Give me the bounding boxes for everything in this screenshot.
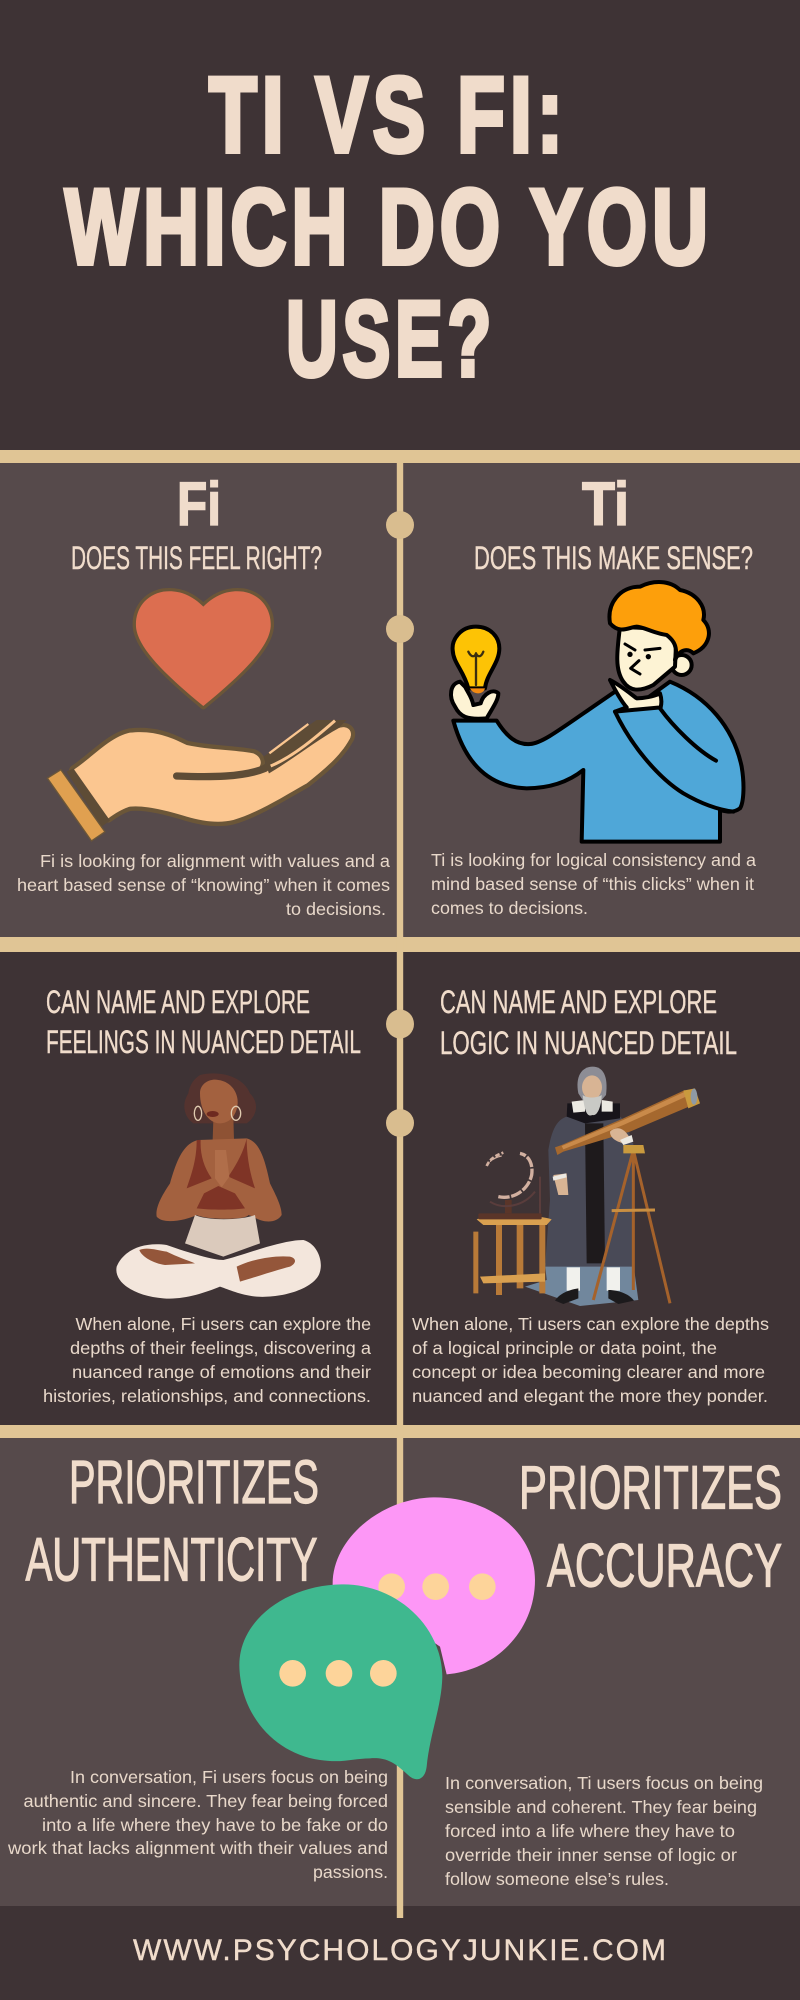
heading: prioritizes accuracy	[519, 1454, 782, 1600]
body text: Fi conversation: In conversation, Fi users focus on being	[70, 1767, 388, 1787]
heading: feelings in nuanced detail	[46, 984, 361, 1060]
heading: prioritizes authenticity: PRIORITIZES	[69, 1448, 319, 1516]
horizontal bands	[0, 450, 800, 1438]
panel: nuanced detail	[0, 952, 800, 1425]
body text: Ti consistency: Ti is looking for logical consistency and a	[431, 850, 756, 870]
body text: Fi alone	[43, 1314, 371, 1406]
body text: Fi alignment: to decisions.	[286, 899, 386, 919]
icon: heart above open hand	[48, 591, 351, 840]
title: TI VS FI:	[209, 54, 568, 174]
body text: Fi alignment: Fi is looking for alignment with values and a	[40, 851, 390, 871]
body text: Ti alone	[412, 1314, 769, 1406]
Fi column	[17, 470, 390, 919]
heading: prioritizes authenticity: AUTHENTICITY	[26, 1526, 318, 1594]
body text: Ti conversation: follow someone else’s rules.	[445, 1869, 669, 1889]
body text: Fi conversation: work that lacks alignment with their values and	[7, 1838, 388, 1858]
heading: feelings in nuanced detail: CAN NAME AND EXPLORE	[46, 984, 310, 1020]
body text: Fi conversation: authentic and sincere. They fear being forced	[24, 1791, 388, 1811]
body text: Ti consistency: comes to decisions.	[431, 898, 588, 918]
body text: Ti conversation: override their inner sense of logic or	[445, 1845, 737, 1865]
center divider with dots	[386, 463, 414, 1918]
Fi column	[43, 984, 371, 1406]
icon: overlapping speech bubbles	[239, 1497, 535, 1779]
illustration: astronomer with telescope and globe	[473, 1067, 700, 1306]
body text: Fi alone: depths of their feelings, discovering a	[70, 1338, 371, 1358]
body text: Fi alone: When alone, Fi users can explore the	[76, 1314, 371, 1334]
icon: thinking man holding light bulb	[451, 582, 743, 842]
panel: what Fi and Ti ask	[0, 463, 800, 937]
footer	[0, 1906, 800, 2000]
body text: Fi alignment	[17, 851, 390, 919]
body text: Ti conversation: sensible and coherent. They fear being	[445, 1797, 757, 1817]
body text: Ti conversation: In conversation, Ti users focus on being	[445, 1773, 763, 1793]
Ti column	[412, 984, 769, 1406]
body text: Ti alone: When alone, Ti users can explore the depths	[412, 1314, 769, 1334]
body text: Ti consistency	[431, 850, 756, 918]
website address: WWW.PSYCHOLOGYJUNKIE.COM	[133, 1934, 666, 1967]
heading: prioritizes authenticity	[26, 1448, 319, 1594]
body text: Ti alone: nuanced and elegant the more they ponder.	[412, 1386, 768, 1406]
body text: Fi alone: nuanced range of emotions and their	[72, 1362, 371, 1382]
green speech bubble	[239, 1584, 442, 1779]
body text: Fi conversation: passions.	[313, 1862, 388, 1882]
header panel	[0, 0, 800, 450]
body text: Fi conversation: into a life where they have to be fake or do	[42, 1815, 388, 1835]
panel: priorities	[0, 1438, 800, 1906]
heading: Ti: Ti	[582, 470, 629, 538]
heading: logic in nuanced detail	[440, 984, 737, 1061]
title	[65, 54, 713, 398]
body text: Ti alone: of a logical principle or data point, the	[412, 1338, 717, 1358]
heading: feelings in nuanced detail: FEELINGS IN NUANCED DETAIL	[46, 1024, 361, 1060]
body text: Fi alone: histories, relationships, and connections.	[43, 1386, 371, 1406]
body text: Ti alone: concept or idea becoming clearer and more	[412, 1362, 765, 1382]
pink speech bubble	[333, 1497, 535, 1674]
title: USE?	[286, 278, 496, 398]
illustration: meditating woman	[116, 1073, 321, 1299]
body text: Fi conversation	[7, 1767, 388, 1882]
body text: Fi alignment: heart based sense of “knowing” when it comes	[17, 875, 390, 895]
body text: Ti conversation	[445, 1773, 763, 1889]
subheading: does this feel right: DOES THIS FEEL RIGHT?	[71, 540, 322, 576]
heading: Fi: Fi	[177, 470, 221, 538]
body text: Ti conversation: forced into a life where they have to	[445, 1821, 735, 1841]
Ti column	[431, 470, 756, 918]
body text: Ti consistency: mind based sense of “this clicks” when it	[431, 874, 754, 894]
